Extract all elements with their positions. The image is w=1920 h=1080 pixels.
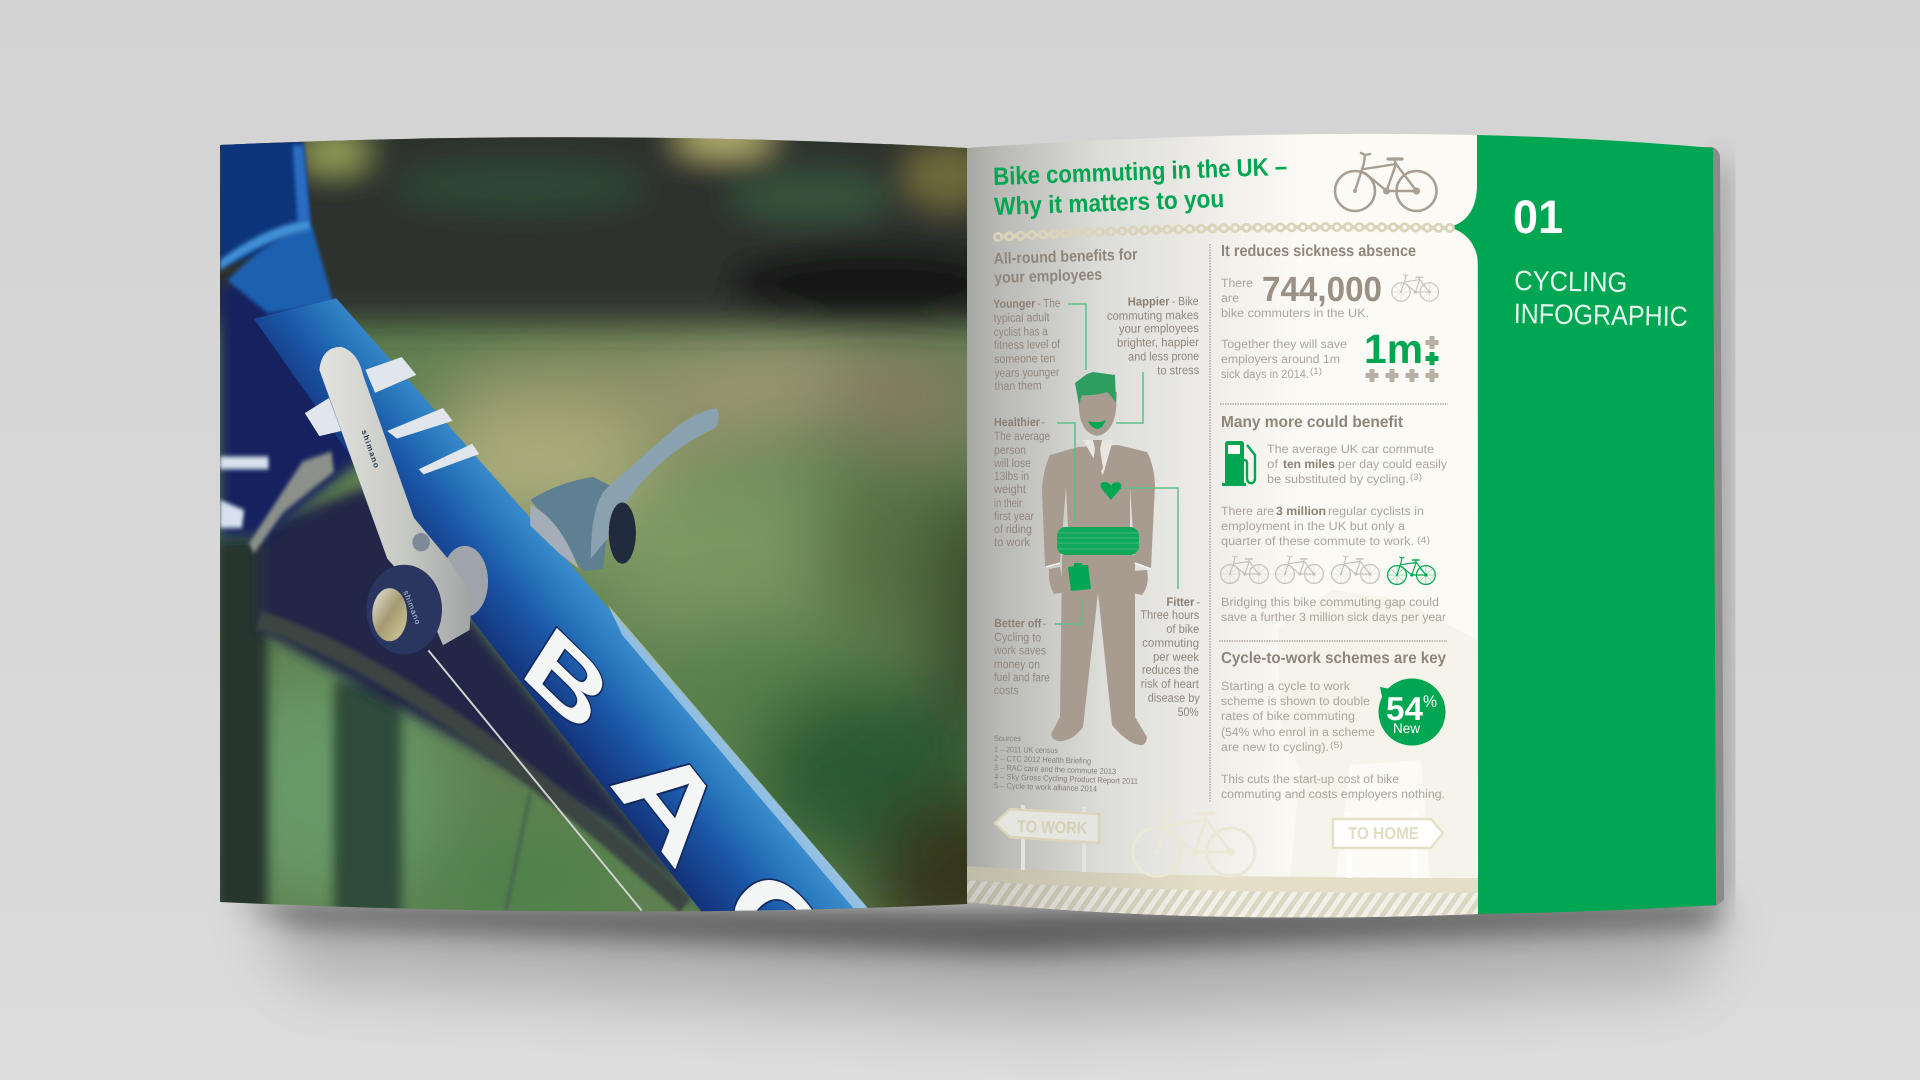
text: bridging the gap	[1221, 595, 1446, 624]
stat: 744,000: There	[1221, 276, 1253, 290]
green section panel	[1447, 135, 1716, 914]
tie	[1092, 440, 1103, 478]
stat: 744,000: bike commuters in the UK.	[1221, 306, 1369, 320]
section title	[1513, 265, 1689, 332]
callout: 54% new: 54	[1386, 690, 1424, 727]
icon: fuel pump	[1222, 441, 1255, 486]
heading: It reduces sickness absence	[1221, 243, 1416, 260]
connector lines	[1055, 304, 1178, 624]
hair	[1075, 372, 1116, 405]
text: better off: work saves	[993, 643, 1046, 657]
text: healthier: first year	[994, 509, 1034, 523]
text: start-up cost: This cuts the start-up cost of bike	[1221, 772, 1399, 786]
text: 3 million: employment in the UK but only a	[1221, 519, 1405, 533]
text: fitter: -	[1196, 595, 1200, 609]
text: 3 million	[1221, 504, 1430, 548]
sign: to home	[1333, 812, 1443, 878]
text: fitter: of bike	[1166, 622, 1200, 636]
section title: CYCLING	[1514, 265, 1628, 298]
main silver shifter: shimano	[401, 589, 422, 626]
text: bridging the gap: Bridging this bike commuting gap could	[1221, 595, 1439, 609]
text: fitter: risk of heart	[1141, 677, 1199, 691]
road band and stripes	[967, 866, 1478, 918]
book mockup infographic	[220, 134, 1736, 1034]
section: many more could benefit	[1221, 414, 1447, 624]
gear cable	[428, 650, 642, 911]
text: bridging the gap: save a further 3 million sick days per year	[1221, 610, 1446, 624]
text: 3 million: 3 million	[1276, 504, 1326, 518]
heading: all-round benefits	[993, 246, 1138, 287]
heading: all-round benefits: All-round benefits for	[993, 246, 1138, 268]
text: younger: Younger	[993, 296, 1036, 311]
left page: blurred bicycle photograph	[220, 137, 967, 912]
text: ten miles: per day could easily	[1338, 457, 1447, 471]
sign: to work: TO WORK	[1017, 817, 1088, 838]
section: cycle-to-work schemes	[1221, 650, 1446, 801]
text: ten miles	[1267, 442, 1447, 486]
text: happier: brighter, happier	[1117, 335, 1199, 350]
face	[1078, 392, 1117, 436]
text: healthier: in their	[994, 496, 1022, 510]
section number: 01	[1513, 190, 1563, 243]
stat text: sick days: employers around 1m	[1221, 352, 1340, 366]
text: ten miles: The average UK car commute	[1267, 442, 1434, 456]
column divider	[1209, 244, 1211, 802]
text: ten miles: of	[1267, 457, 1279, 471]
out of focus frame tubes and wheel	[215, 140, 705, 926]
section: it reduces sickness absence	[1221, 243, 1438, 382]
text: healthier: -	[1041, 415, 1045, 429]
sources	[994, 734, 1139, 794]
stat text: sick days: (1)	[1310, 366, 1322, 376]
text: younger: years younger	[994, 365, 1059, 380]
text: scheme description: (5)	[1330, 740, 1343, 750]
heart	[1100, 482, 1121, 500]
main silver shifter: shimano	[360, 429, 380, 469]
text: ten miles: (3)	[1410, 472, 1422, 482]
second shifter lever	[530, 408, 719, 571]
frame lettering: C	[698, 844, 855, 1010]
text: fitter: per week	[1153, 650, 1200, 664]
heading: Cycle-to-work schemes are key	[1221, 650, 1446, 667]
text: better off: fuel and fare	[994, 670, 1050, 684]
text: scheme description: scheme is shown to double	[1221, 694, 1370, 708]
text: fitter: 50%	[1178, 705, 1199, 719]
trousers and shoes	[1051, 555, 1147, 745]
text: younger: - The	[1037, 296, 1061, 310]
text: 3 million: regular cyclists in	[1328, 504, 1424, 518]
text: ten miles: be substituted by cycling.	[1267, 472, 1409, 486]
text: scheme description: are new to cycling).	[1221, 740, 1329, 754]
text: fitter: commuting	[1142, 636, 1199, 650]
sources: 2 – CTC 2012 Health Briefing	[994, 754, 1091, 766]
tube highlight edge	[608, 604, 874, 916]
text: happier: and less prone	[1128, 349, 1199, 364]
text: happier: commuting makes	[1107, 308, 1199, 323]
man figure	[1042, 372, 1155, 745]
stat: 744,000: 744,000	[1262, 270, 1382, 309]
jacket and arms	[1042, 445, 1155, 568]
cuffs	[1046, 563, 1151, 569]
text: 3 million: (4)	[1417, 535, 1430, 545]
text: younger: than them	[994, 378, 1042, 393]
text: happier: to stress	[1157, 363, 1199, 377]
text: healthier: to work	[994, 535, 1031, 549]
section title: INFOGRAPHIC	[1513, 298, 1688, 332]
stat text: sick days: sick days in 2014.	[1221, 367, 1309, 381]
text: younger: cyclist has a	[994, 324, 1048, 339]
text: healthier: Healthier	[994, 415, 1040, 429]
sources: 4 – Sky Gross Cycling Product Report 2011	[994, 772, 1139, 786]
text: start-up cost: commuting and costs employers nothing.	[1221, 787, 1445, 801]
background scenery on right page	[967, 590, 1480, 930]
stat: 744,000	[1221, 270, 1382, 320]
text: fitter	[1140, 595, 1200, 719]
text: younger: someone ten	[994, 351, 1055, 366]
text: healthier: 13lbs in	[994, 469, 1029, 483]
text: happier: your employees	[1119, 321, 1199, 336]
text: better off: Cycling to	[994, 630, 1042, 644]
icon: small bicycle	[1392, 275, 1438, 301]
text: better off: money on	[994, 657, 1040, 671]
page title: Why it matters to you	[994, 185, 1225, 221]
waist belt	[1057, 527, 1139, 555]
text: younger: typical adult	[993, 310, 1050, 325]
callout: 54% new: %	[1423, 692, 1437, 711]
main blue tube	[254, 298, 874, 916]
frame white bands	[305, 357, 479, 474]
frame lettering: B	[508, 606, 626, 753]
text: younger: fitness level of	[994, 337, 1061, 352]
stat text: sick days: Together they will save	[1221, 337, 1347, 351]
text: scheme description: rates of bike commuting	[1221, 709, 1355, 723]
heading: Many more could benefit	[1221, 414, 1404, 431]
text: fitter: Three hours	[1140, 608, 1199, 622]
page edge block	[1700, 147, 1724, 906]
callout: 54% new	[1378, 678, 1446, 746]
text: start-up cost	[1221, 772, 1445, 801]
photo background	[220, 137, 967, 912]
text: happier: - Bike	[1172, 294, 1199, 308]
hands	[1049, 567, 1148, 595]
text: scheme description: Starting a cycle to work	[1221, 679, 1351, 693]
sources: 1 – 2011 UK census	[994, 745, 1058, 755]
icon: large bicycle	[1335, 153, 1436, 211]
text: 3 million: quarter of these commute to work.	[1221, 534, 1414, 548]
main silver shifter	[319, 347, 488, 654]
text: ten miles: ten miles	[1283, 457, 1335, 471]
text: younger	[993, 296, 1062, 393]
text: better off	[993, 616, 1051, 697]
text: healthier	[993, 415, 1050, 549]
text: happier: Happier	[1128, 294, 1170, 309]
text: fitter: reduces the	[1142, 663, 1199, 677]
stat: 744,000: are	[1221, 291, 1239, 305]
stat text: sick days	[1221, 337, 1347, 381]
text: fitter: disease by	[1148, 691, 1200, 705]
text: better off: costs	[994, 683, 1019, 697]
callout: 54% new: New	[1393, 720, 1421, 736]
divider two	[1219, 640, 1447, 642]
sources: 5 – Cycle to work alliance 2014	[994, 781, 1098, 794]
right page paper	[967, 134, 1478, 918]
text: healthier: The average	[994, 429, 1050, 443]
stat: 1m plus: 1m	[1364, 326, 1423, 372]
text: fitter: Fitter	[1166, 595, 1195, 609]
smile	[1088, 420, 1106, 429]
text: healthier: of riding	[994, 522, 1032, 536]
frame lettering: A	[591, 714, 750, 889]
text: healthier: will lose	[993, 456, 1031, 470]
sources: Sources	[994, 734, 1021, 743]
page title: Bike commuting in the UK –	[993, 153, 1288, 191]
text: 3 million: There are	[1221, 504, 1274, 518]
sign: to home: TO HOME	[1348, 824, 1419, 843]
chain divider	[998, 227, 1450, 237]
heading: all-round benefits: your employees	[994, 267, 1102, 287]
text: healthier: weight	[993, 482, 1027, 496]
text: scheme description: (54% who enrol in a scheme	[1221, 725, 1375, 739]
frame lettering	[508, 606, 855, 1010]
wallet	[1068, 563, 1091, 591]
book drop shadow	[232, 155, 1730, 1020]
sources: 3 – RAC care and the commute 2013	[994, 763, 1117, 776]
page title	[993, 153, 1289, 221]
text: happier	[1107, 294, 1200, 378]
ghost bicycle	[1133, 806, 1255, 876]
text: better off: -	[1042, 616, 1046, 630]
ghost tree silhouette	[1278, 590, 1477, 880]
shirt collar	[1083, 440, 1113, 475]
text: scheme description	[1221, 679, 1375, 754]
text: better off: Better off	[994, 616, 1042, 630]
stat: 1m plus	[1364, 326, 1438, 382]
text: healthier: person	[994, 443, 1026, 457]
sign: to work	[995, 805, 1099, 872]
icon row: four bicycles	[1221, 556, 1435, 584]
divider one	[1220, 403, 1448, 405]
